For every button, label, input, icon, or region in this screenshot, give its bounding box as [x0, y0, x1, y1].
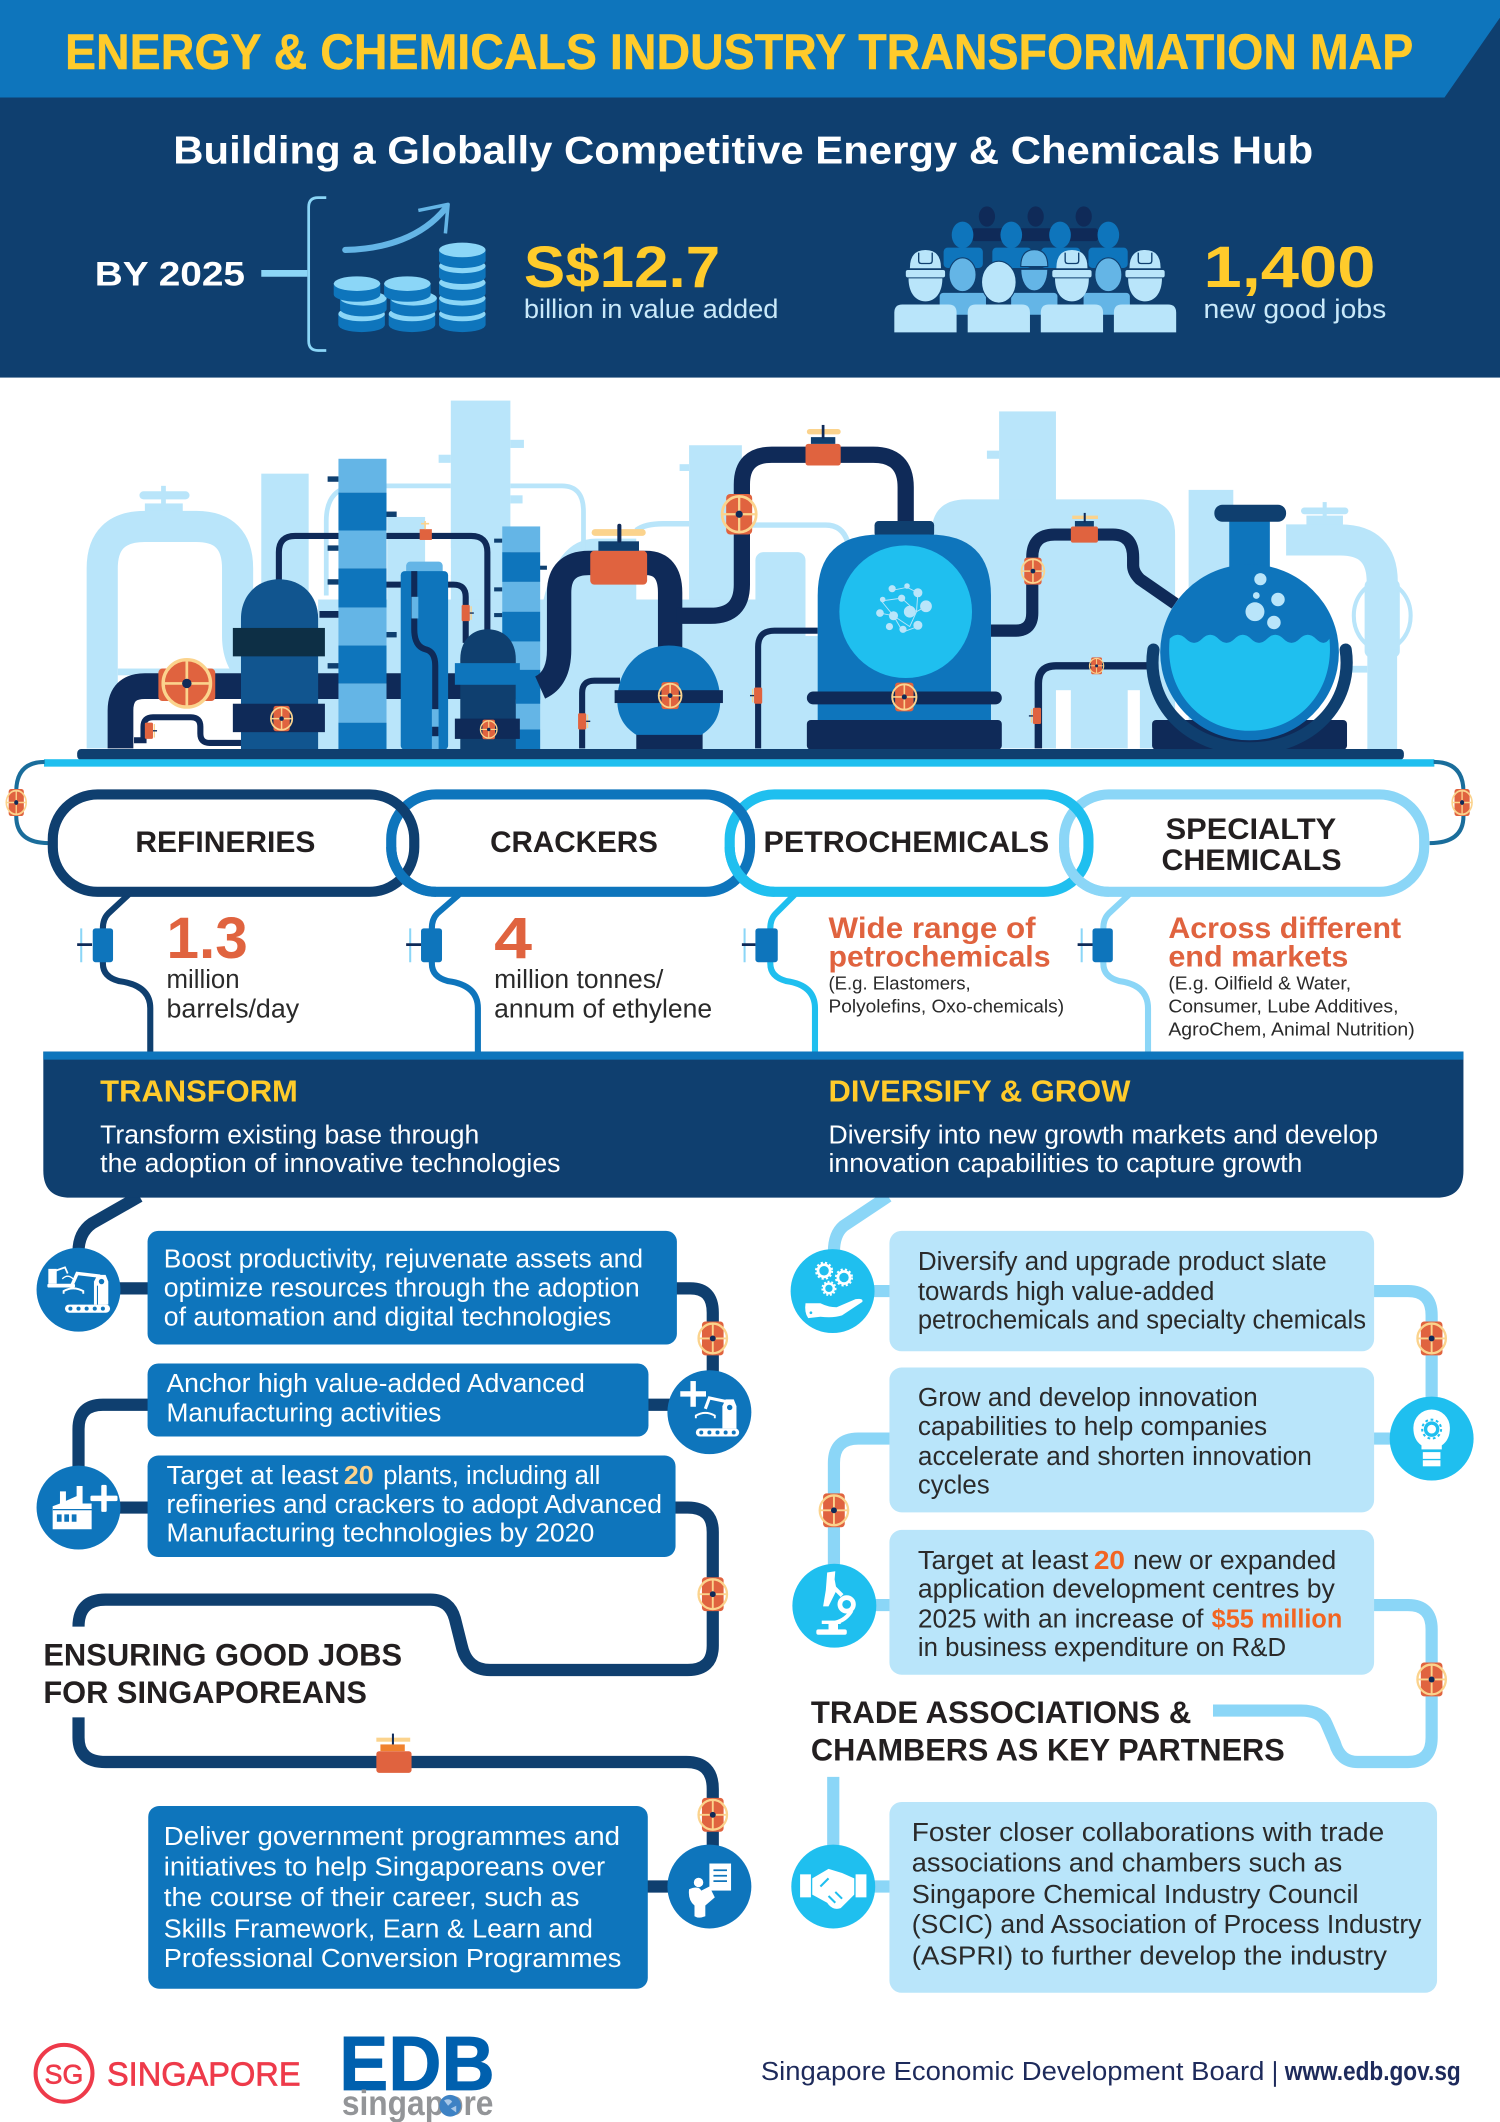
panel: foster collaborations: (SCIC) and Association of Process Industry — [912, 1911, 1422, 1939]
crackers stem — [432, 895, 478, 1053]
panel: target 20 plants: 20 — [344, 1462, 374, 1490]
tank with molecule — [807, 521, 1002, 750]
panel: anchor advanced manufacturing: Anchor high value-added Advanced — [167, 1370, 585, 1398]
flask — [1152, 505, 1347, 750]
panel: target 20 plants: plants, including all — [383, 1462, 600, 1490]
couplings — [77, 928, 1113, 962]
text: diversify description: Diversify into new growth markets and develop — [829, 1122, 1378, 1150]
icon: molecule — [877, 584, 931, 632]
refinery arch valve — [590, 524, 647, 585]
platform — [77, 749, 1404, 760]
panel: target 20 centres: 2025 with an increase of — [918, 1605, 1204, 1633]
heading: ensuring good jobs: FOR SINGAPOREANS — [43, 1675, 367, 1710]
panel: innovation capabilities: Grow and develop innovation — [918, 1384, 1258, 1412]
stat: refineries: barrels/day — [167, 996, 299, 1024]
logo: Singapore — [36, 2045, 301, 2102]
specialty stem — [1103, 895, 1148, 1053]
background silhouettes — [102, 401, 1411, 750]
logo: Singapore: SG — [45, 2059, 83, 2089]
icon: workers crowd — [894, 206, 1176, 332]
small column with dome — [455, 629, 540, 750]
jobs figure: 1,400 — [1204, 235, 1375, 300]
icon: microscope — [792, 1564, 876, 1648]
panel: foster collaborations: associations and chambers such as — [912, 1850, 1342, 1878]
icon: plus and robot arm — [667, 1370, 751, 1454]
panel: boost productivity: Boost productivity, rejuvenate assets and — [164, 1245, 643, 1273]
thin service pipes — [134, 536, 1151, 748]
stem pipes from pills — [103, 895, 1148, 1053]
stat: specialty chemicals — [1168, 912, 1415, 1039]
icon: robot arms — [37, 1248, 120, 1332]
panel: diversify product slate: Diversify and upgrade product slate — [918, 1248, 1327, 1276]
panel: diversify product slate: petrochemicals and specialty chemicals — [918, 1306, 1366, 1334]
panel: government programmes — [148, 1806, 648, 1989]
stat: petrochemicals: petrochemicals — [829, 940, 1051, 973]
stat: petrochemicals: (E.g. Elastomers, — [829, 972, 971, 993]
petrochemicals stem — [770, 895, 815, 1053]
panel: innovation capabilities: capabilities to help companies — [918, 1413, 1267, 1441]
stat: specialty chemicals: (E.g. Oilfield & Water, — [1168, 972, 1351, 993]
panel: target 20 centres: 20 — [1094, 1547, 1125, 1575]
icon: factory and plus — [37, 1466, 120, 1550]
panel: foster collaborations: Singapore Chemical Industry Council — [912, 1881, 1359, 1909]
stat: refineries: million — [167, 966, 240, 994]
panel: foster collaborations: (ASPRI) to further develop the industry — [912, 1942, 1387, 1970]
short striped tower — [502, 526, 540, 750]
stat: specialty chemicals: end markets — [1168, 940, 1348, 973]
pipes: right column — [833, 1196, 1432, 1887]
pipe valves — [699, 1322, 1446, 1832]
panel: government programmes: the course of their career, such as — [164, 1884, 579, 1912]
stat: petrochemicals: Polyolefins, Oxo-chemicals) — [829, 995, 1064, 1016]
value added caption: billion in value added — [524, 293, 778, 324]
panel: diversify product slate: towards high value-added — [918, 1278, 1214, 1306]
panel: government programmes: initiatives to help Singaporeans over — [164, 1854, 606, 1882]
sphere vessel — [615, 646, 723, 750]
pipes: left column — [79, 1196, 713, 1887]
stat: specialty chemicals: AgroChem, Animal Nutrition) — [1168, 1018, 1415, 1039]
label: crackers: CRACKERS — [490, 826, 658, 859]
top valve — [806, 425, 841, 466]
panel: government programmes: Skills Framework, Earn & Learn and — [164, 1915, 593, 1943]
panel: target 20 plants — [148, 1455, 676, 1557]
logo: EDB: EDB — [339, 2021, 495, 2107]
panel: boost productivity — [148, 1231, 677, 1345]
column with dome — [233, 579, 325, 750]
panel: target 20 centres: new or expanded — [1133, 1547, 1336, 1575]
stat: crackers — [494, 906, 712, 1024]
label: petrochemicals: PETROCHEMICALS — [764, 826, 1049, 859]
title: ENERGY & CHEMICALS INDUSTRY TRANSFORMATION MAP — [65, 24, 1413, 80]
inline valve on jobs pipe — [376, 1734, 412, 1773]
text: transform description: the adoption of innovative technologies — [100, 1150, 560, 1178]
label: specialty chemicals: CHEMICALS — [1162, 844, 1342, 877]
stat: petrochemicals: Wide range of — [829, 912, 1036, 945]
panel: target 20 plants: Target at least — [167, 1462, 338, 1490]
value added figure: S$12.7 — [524, 235, 720, 300]
text: diversify description: innovation capabilities to capture growth — [829, 1150, 1302, 1178]
bracket connector — [261, 198, 326, 351]
subtitle: Building a Globally Competitive Energy & Chemicals Hub — [173, 129, 1313, 173]
panel: target 20 centres: Target at least — [918, 1547, 1088, 1575]
panel: government programmes: Deliver government programmes and — [164, 1823, 620, 1851]
stat: refineries — [167, 906, 299, 1024]
top arched pipe — [677, 455, 906, 616]
heading: diversify and grow: DIVERSIFY & GROW — [829, 1075, 1131, 1109]
text: transform description — [100, 1122, 560, 1178]
by 2025 label: BY 2025 — [95, 256, 245, 294]
side loops — [6, 762, 1472, 843]
panel: target 20 plants: Manufacturing technologies by 2020 — [167, 1519, 594, 1547]
icon: gears and hand — [791, 1249, 875, 1333]
stat: crackers: annum of ethylene — [494, 996, 712, 1024]
panel: foster collaborations: Foster closer collaborations with trade — [912, 1819, 1384, 1847]
panel: target 20 centres — [889, 1530, 1374, 1675]
panel: boost productivity: optimize resources through the adoption — [164, 1274, 640, 1302]
striped tower — [338, 459, 387, 750]
panel: innovation capabilities — [889, 1368, 1374, 1512]
footer text: www.edb.gov.sg — [1284, 2058, 1461, 2086]
panel: transform and diversify band — [43, 1052, 1463, 1198]
label: refineries: REFINERIES — [135, 826, 315, 859]
panel: sector pills — [53, 794, 1424, 892]
text: transform description: Transform existing base through — [100, 1122, 479, 1150]
panel: boost productivity: of automation and digital technologies — [164, 1304, 611, 1332]
panel: target 20 centres: application development centres by — [918, 1576, 1335, 1604]
icon: handshake — [791, 1845, 875, 1928]
icon: person with document — [667, 1845, 751, 1928]
panel: target 20 plants: refineries and crackers to adopt Advanced — [167, 1491, 662, 1519]
stat: specialty chemicals: Across different — [1168, 912, 1401, 945]
panel: target 20 centres: in business expenditure on R&D — [918, 1634, 1286, 1662]
icon: bulb with gear — [1390, 1397, 1474, 1481]
logo: Singapore: SINGAPORE — [107, 2056, 301, 2093]
label: specialty chemicals: SPECIALTY — [1166, 813, 1336, 846]
icon: coin stacks with arrow — [334, 204, 486, 332]
panel: diversify product slate — [889, 1231, 1374, 1351]
cyan feed line — [44, 759, 1434, 767]
text: diversify description — [829, 1122, 1378, 1178]
heading: trade associations: CHAMBERS AS KEY PARTNERS — [811, 1733, 1285, 1768]
stat: petrochemicals — [829, 912, 1064, 1016]
footer text: Singapore Economic Development Board — [761, 2058, 1264, 2086]
tall column with inner pipe — [401, 562, 448, 750]
heading: ensuring good jobs — [43, 1637, 402, 1710]
tower tabs — [328, 476, 547, 669]
footer text — [761, 2058, 1461, 2087]
wheel valves — [158, 494, 756, 708]
small valves — [145, 521, 1041, 739]
thick arched pipe — [540, 563, 670, 687]
panel: header — [0, 0, 1500, 378]
panel: target 20 centres: $55 million — [1212, 1605, 1342, 1633]
jobs caption: new good jobs — [1204, 293, 1386, 324]
panel: innovation capabilities: cycles — [918, 1471, 990, 1499]
stat: specialty chemicals: Consumer, Lube Additives, — [1168, 995, 1398, 1016]
panel: anchor advanced manufacturing — [148, 1363, 648, 1437]
label: specialty chemicals — [1162, 813, 1342, 877]
heading: transform: TRANSFORM — [100, 1075, 298, 1109]
panel: foster collaborations — [889, 1802, 1437, 1993]
heading: trade associations: TRADE ASSOCIATIONS & — [811, 1695, 1191, 1730]
stat: crackers: million tonnes/ — [494, 966, 664, 994]
panel: government programmes: Professional Conversion Programmes — [164, 1945, 621, 1973]
panel: anchor advanced manufacturing: Manufacturing activities — [167, 1400, 441, 1428]
pipe to flask — [991, 513, 1175, 674]
illustration: refinery and chemical plant — [44, 401, 1434, 767]
stat: crackers: 4 — [494, 906, 533, 971]
main dark pipe — [120, 686, 474, 748]
panel: innovation capabilities: accelerate and shorten innovation — [918, 1443, 1312, 1471]
heading: ensuring good jobs: ENSURING GOOD JOBS — [43, 1637, 402, 1672]
heading: trade associations — [811, 1695, 1285, 1768]
refineries stem — [103, 895, 150, 1053]
stat: refineries: 1.3 — [167, 906, 248, 971]
